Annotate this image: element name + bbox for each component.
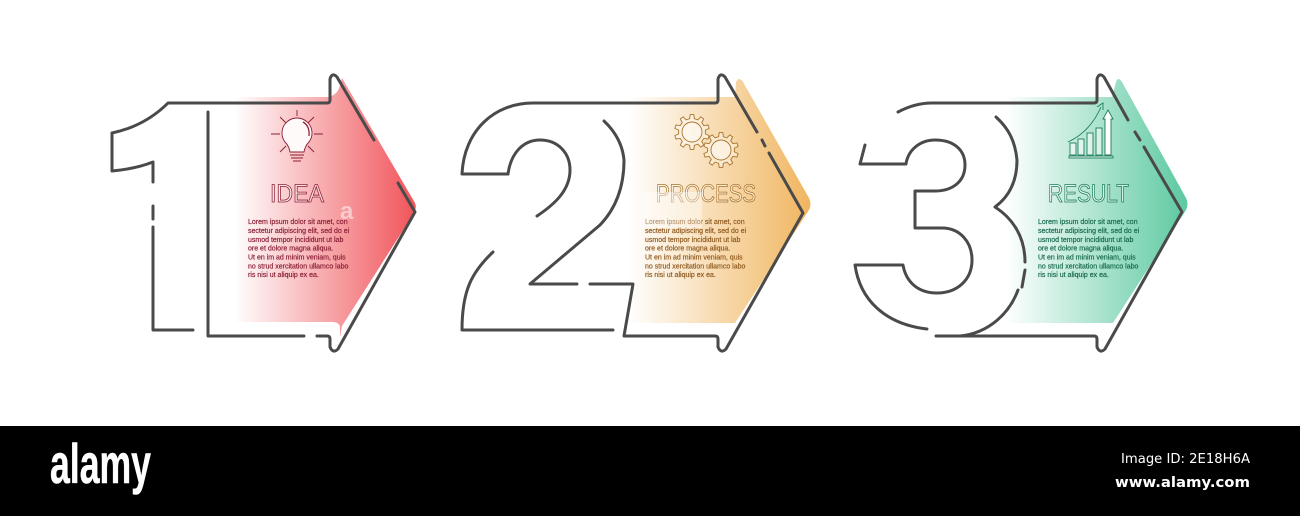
website url: www.alamy.com: [1115, 475, 1250, 491]
text block: result description: usmod tempor incididunt ut lab: [1038, 237, 1133, 244]
text block: result description: sectetur adipiscing elit, sed do ei: [1038, 228, 1140, 235]
watermark block: [640, 192, 702, 228]
numeral 1 arrow outline: [112, 75, 415, 351]
arrow fill: red gradient: [234, 78, 416, 337]
alamy logo: alamy: [50, 432, 151, 495]
text block: process description: ris nisi ut aliquip ex ea.: [645, 272, 716, 279]
panel: step 3 result: [855, 75, 1188, 351]
numeral 2 arrow outline: [462, 75, 803, 351]
heading: PROCESS: PROCESS: [656, 180, 756, 208]
text block: process description: Lorem ipsum dolor sit amet, con: [645, 219, 745, 226]
text block: idea description: sectetur adipiscing elit, sed do ei: [248, 228, 350, 235]
heading: RESULT: RESULT: [1048, 180, 1129, 208]
text block: idea description: Lorem ipsum dolor sit amet, con: [248, 219, 348, 226]
text block: process description: Ut en im ad minim veniam, quis: [645, 254, 743, 262]
panel: step 1 idea: [112, 75, 416, 351]
arrow fill: orange gradient: [628, 79, 810, 323]
text block: result description: no strud xercitation ullamco labo: [1038, 264, 1138, 270]
text block: idea description: usmod tempor incididunt ut lab: [248, 237, 343, 244]
text block: idea description: ore et dolore magna aliqua.: [248, 246, 333, 252]
text block: process description: no strud xercitation ullamco labo: [645, 264, 745, 270]
text block: idea description: no strud xercitation ullamco labo: [248, 264, 348, 270]
arrow fill: green gradient: [1005, 79, 1188, 323]
watermark letter: a: [340, 198, 354, 225]
image id: Image ID: 2E18H6A: [1121, 452, 1250, 467]
text block: process description: sectetur adipiscing elit, sed do ei: [645, 228, 747, 235]
heading: IDEA: IDEA: [270, 180, 324, 208]
text block: idea description: ris nisi ut aliquip ex ea.: [248, 272, 319, 279]
text block: process description: ore et dolore magna aliqua.: [645, 246, 730, 252]
text block: process description: usmod tempor incididunt ut lab: [645, 237, 740, 244]
text block: result description: Lorem ipsum dolor sit amet, con: [1038, 219, 1138, 226]
text block: result description: ris nisi ut aliquip ex ea.: [1038, 272, 1109, 279]
text block: result description: Ut en im ad minim veniam, quis: [1038, 254, 1136, 262]
numeral 3 arrow outline: [855, 75, 1182, 351]
icon: gears: [675, 115, 738, 167]
text block: result description: ore et dolore magna aliqua.: [1038, 246, 1123, 252]
panel: step 2 process: [462, 75, 810, 351]
icon: light bulb: [271, 110, 323, 161]
icon: growth chart: [1068, 103, 1113, 158]
text block: idea description: Ut en im ad minim veniam, quis: [248, 254, 346, 262]
footer band: [0, 426, 1300, 516]
